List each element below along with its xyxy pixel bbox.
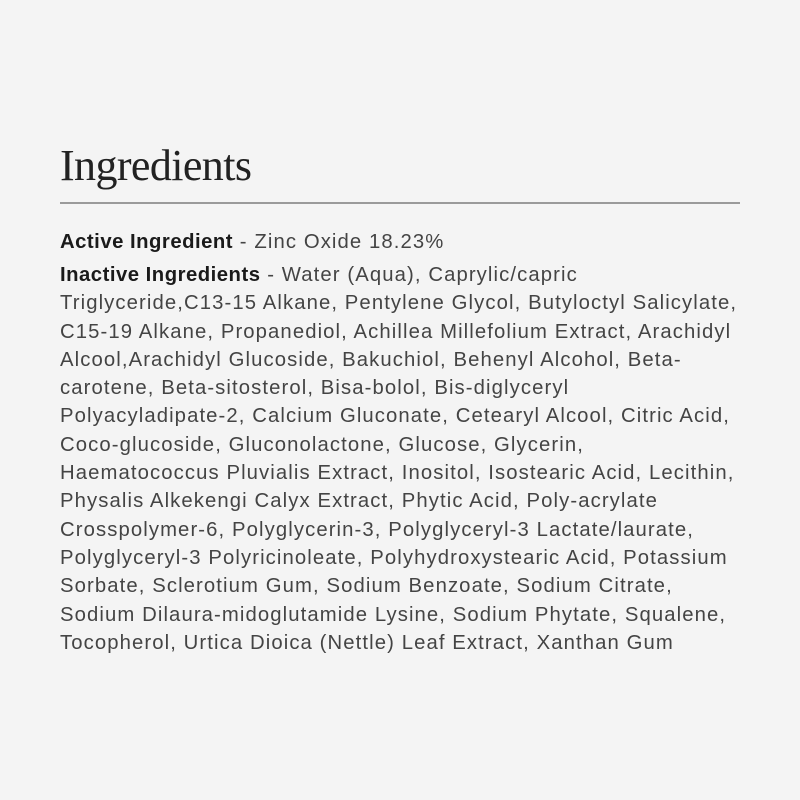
inactive ingredients text: Alcool,Arachidyl Glucoside, Bakuchiol, Behenyl Alcohol, Beta- bbox=[60, 349, 682, 371]
active ingredient text: Active Ingredient - Zinc Oxide 18.23% bbox=[60, 231, 444, 253]
title: Ingredients bbox=[60, 141, 251, 190]
inactive ingredients text: carotene, Beta-sitosterol, Bisa-bolol, Bis-diglyceryl bbox=[60, 377, 569, 399]
inactive ingredients text: Sorbate, Sclerotium Gum, Sodium Benzoate, Sodium Citrate, bbox=[60, 575, 673, 597]
inactive ingredients text: Crosspolymer-6, Polyglycerin-3, Polyglyceryl-3 Lactate/laurate, bbox=[60, 519, 694, 541]
inactive ingredients text: Polyglyceryl-3 Polyricinoleate, Polyhydroxystearic Acid, Potassium bbox=[60, 547, 728, 569]
inactive ingredients text: C15-19 Alkane, Propanediol, Achillea Millefolium Extract, Arachidyl bbox=[60, 321, 731, 343]
inactive ingredients text: Inactive Ingredients - Water (Aqua), Caprylic/capric bbox=[60, 264, 578, 286]
inactive ingredients text: Polyacyladipate-2, Calcium Gluconate, Cetearyl Alcool, Citric Acid, bbox=[60, 405, 730, 427]
inactive ingredients text bbox=[60, 264, 737, 654]
inactive ingredients text: Tocopherol, Urtica Dioica (Nettle) Leaf Extract, Xanthan Gum bbox=[60, 632, 674, 654]
inactive ingredients text: Triglyceride,C13-15 Alkane, Pentylene Glycol, Butyloctyl Salicylate, bbox=[60, 292, 737, 314]
inactive ingredients text: Haematococcus Pluvialis Extract, Inositol, Isostearic Acid, Lecithin, bbox=[60, 462, 734, 484]
inactive ingredients text: Sodium Dilaura-midoglutamide Lysine, Sodium Phytate, Squalene, bbox=[60, 604, 726, 626]
inactive ingredients text: Physalis Alkekengi Calyx Extract, Phytic Acid, Poly-acrylate bbox=[60, 490, 658, 512]
inactive ingredients text: Coco-glucoside, Gluconolactone, Glucose, Glycerin, bbox=[60, 434, 584, 456]
